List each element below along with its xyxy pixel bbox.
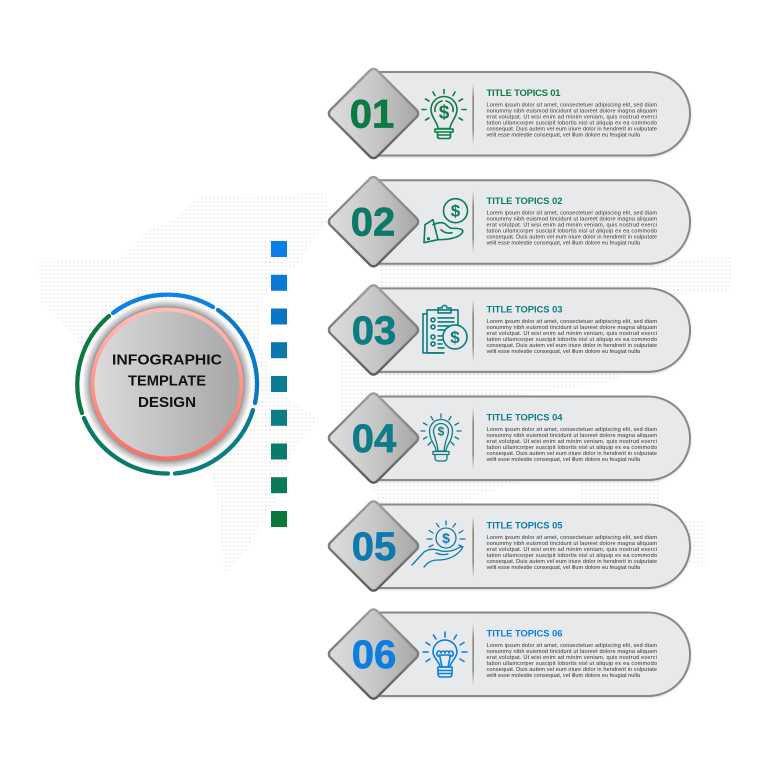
number diamond — [327, 607, 420, 701]
heading: TITLE TOPICS 05 — [486, 520, 562, 530]
ring segment: blue right — [218, 310, 257, 403]
number: 01 — [350, 92, 394, 136]
ring segment: green left — [77, 316, 109, 413]
body text: Lorem ipsum dolor sit amet, consectetuer adipiscing elit, sed diam — [486, 319, 657, 325]
body text: tation ullamcorper suscipit lobortis nisl ut aliquip ex ea commodo — [486, 229, 657, 235]
heading: TITLE TOPICS 01 — [486, 87, 560, 98]
heading: TITLE TOPICS 04 — [486, 412, 563, 422]
icon: money light bulb: $ — [439, 102, 450, 124]
panel: topic 01 — [327, 67, 690, 160]
body text: erat volutpat. Ut wisi enim ad minim veniam, quis nostrud exerci — [486, 331, 657, 337]
body text: Lorem ipsum dolor sit amet, consectetuer adipiscing elit, sed diam — [486, 535, 657, 541]
pill background — [374, 180, 690, 264]
body text: consequat. Duis autem vel eum iriure dolor in hendrerit in vulputate — [486, 343, 657, 349]
body text — [486, 535, 657, 571]
body text: Lorem ipsum dolor sit amet, consectetuer adipiscing elit, sed diam — [486, 102, 657, 108]
pill background — [374, 72, 690, 156]
central circle with segmented ring — [77, 295, 257, 474]
body text — [486, 319, 657, 355]
divider — [472, 83, 474, 145]
body text: erat volutpat. Ut wisi enim ad minim veniam, quis nostrud exerci — [486, 223, 657, 229]
heading: TITLE TOPICS 02 — [486, 195, 562, 206]
divider — [472, 624, 474, 686]
heading: TITLE TOPICS 06 — [486, 628, 562, 638]
icon: open hand with glowing coin — [412, 521, 465, 567]
number: 02 — [351, 201, 395, 245]
panel: topic 02 — [327, 175, 690, 268]
body text: consequat. Duis autem vel eum iriure dolor in hendrerit in vulputate — [486, 667, 657, 673]
number diamond — [327, 67, 420, 160]
panel: topic 06 — [327, 607, 690, 701]
body text: tation ullamcorper suscipit lobortis nisl ut aliquip ex ea commodo — [486, 661, 657, 667]
icon: hand holding coin: $ — [451, 202, 461, 221]
icon: clipboard with coin: $ — [450, 328, 460, 347]
divider — [472, 191, 474, 253]
body text — [486, 211, 657, 247]
number diamond — [327, 175, 420, 268]
body text: tation ullamcorper suscipit lobortis nisl ut aliquip ex ea commodo — [486, 553, 657, 559]
number: 04 — [352, 417, 397, 461]
icon: bulb with dollar: $ — [438, 424, 445, 438]
body text: nonummy nibh euismod tincidunt ut laoreet dolore magna aliquam — [486, 325, 657, 331]
number: 06 — [352, 633, 396, 677]
body text: erat volutpat. Ut wisi enim ad minim veniam, quis nostrud exerci — [486, 547, 657, 553]
ring segment: blue top — [113, 295, 213, 313]
body text: velit esse molestie consequat, vel illum dolore eu feugiat nulla — [486, 132, 641, 138]
body text — [486, 102, 657, 138]
body text: velit esse molestie consequat, vel illum dolore eu feugiat nulla — [486, 457, 641, 463]
pink ring and grey disc — [92, 310, 242, 458]
body text: velit esse molestie consequat, vel illum dolore eu feugiat nulla — [486, 241, 641, 247]
body text — [486, 643, 657, 679]
icon: open hand with glowing coin: $ — [442, 530, 450, 546]
body text: consequat. Duis autem vel eum iriure dolor in hendrerit in vulputate — [486, 559, 657, 565]
background dotted world map — [38, 192, 732, 576]
panel: topic 03 — [327, 283, 690, 377]
pill background — [374, 504, 690, 588]
body text: nonummy nibh euismod tincidunt ut laoreet dolore magna aliquam — [486, 108, 657, 114]
number: 03 — [352, 309, 396, 353]
number: 05 — [352, 525, 396, 569]
icon: bulb with dollar — [421, 414, 461, 461]
body text: nonummy nibh euismod tincidunt ut laoreet dolore magna aliquam — [486, 649, 657, 655]
body text: velit esse molestie consequat, vel illum dolore eu feugiat nulla — [486, 673, 641, 679]
body text: nonummy nibh euismod tincidunt ut laoreet dolore magna aliquam — [486, 433, 657, 439]
body text: tation ullamcorper suscipit lobortis nisl ut aliquip ex ea commodo — [486, 445, 657, 451]
body text: erat volutpat. Ut wisi enim ad minim veniam, quis nostrud exerci — [486, 114, 657, 120]
number diamond — [327, 283, 420, 377]
number diamond — [327, 391, 420, 485]
body text: consequat. Duis autem vel eum iriure dolor in hendrerit in vulputate — [486, 126, 657, 132]
pill background — [374, 288, 690, 372]
body text: erat volutpat. Ut wisi enim ad minim veniam, quis nostrud exerci — [486, 439, 657, 445]
body text — [486, 427, 657, 463]
pill background — [374, 612, 690, 696]
body text: Lorem ipsum dolor sit amet, consectetuer adipiscing elit, sed diam — [486, 427, 657, 433]
icon: money light bulb — [422, 90, 466, 138]
vertical square connector — [271, 241, 287, 527]
icon: hand holding coin — [424, 199, 468, 243]
body text: consequat. Duis autem vel eum iriure dolor in hendrerit in vulputate — [486, 235, 657, 241]
body text: consequat. Duis autem vel eum iriure dolor in hendrerit in vulputate — [486, 451, 657, 457]
body text: velit esse molestie consequat, vel illum dolore eu feugiat nulla — [486, 349, 641, 355]
circle title: DESIGN — [138, 394, 196, 411]
panel: topic 05 — [327, 499, 690, 593]
icon: light bulb with filament — [423, 632, 467, 677]
body text: Lorem ipsum dolor sit amet, consectetuer adipiscing elit, sed diam — [486, 643, 657, 649]
body text: tation ullamcorper suscipit lobortis nisl ut aliquip ex ea commodo — [486, 337, 657, 343]
panel: topic 04 — [327, 391, 690, 485]
divider — [472, 299, 474, 361]
number diamond — [327, 499, 420, 593]
divider — [472, 408, 474, 470]
body text: nonummy nibh euismod tincidunt ut laoreet dolore magna aliquam — [486, 541, 657, 547]
body text: tation ullamcorper suscipit lobortis nisl ut aliquip ex ea commodo — [486, 120, 657, 126]
divider — [472, 516, 474, 578]
body text: erat volutpat. Ut wisi enim ad minim veniam, quis nostrud exerci — [486, 655, 657, 661]
circle title: INFOGRAPHIC — [112, 352, 222, 368]
ring segment: teal-green bottom — [84, 418, 168, 474]
ring segment: teal lower right — [175, 410, 253, 474]
body text: Lorem ipsum dolor sit amet, consectetuer adipiscing elit, sed diam — [486, 211, 657, 217]
heading: TITLE TOPICS 03 — [486, 303, 562, 314]
body text: nonummy nibh euismod tincidunt ut laoreet dolore magna aliquam — [486, 217, 657, 223]
pill background — [374, 396, 690, 480]
circle title — [112, 352, 222, 411]
body text: velit esse molestie consequat, vel illum dolore eu feugiat nulla — [486, 565, 641, 571]
shadow halo — [82, 299, 252, 469]
circle title: TEMPLATE — [128, 372, 206, 390]
icon: clipboard with coin — [423, 305, 467, 353]
